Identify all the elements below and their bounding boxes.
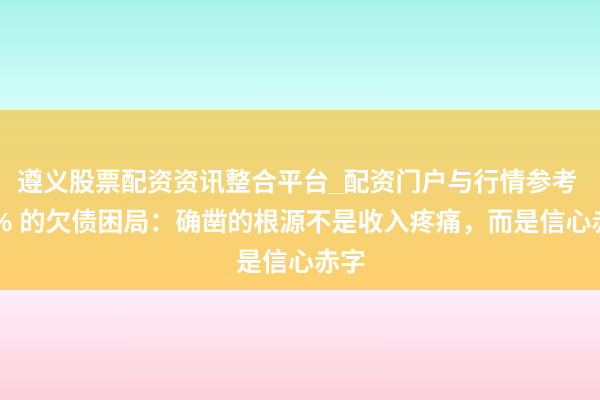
panel: top cyan band (0, 0, 600, 110)
panel: bottom pink band (0, 290, 600, 400)
title text (0, 167, 600, 277)
title line 1: 遵义股票配资资讯整合平台_配资门户与行情参考 (17, 167, 577, 197)
title line 3: 是信心赤字 (236, 247, 366, 277)
panel: middle yellow band (0, 110, 600, 290)
